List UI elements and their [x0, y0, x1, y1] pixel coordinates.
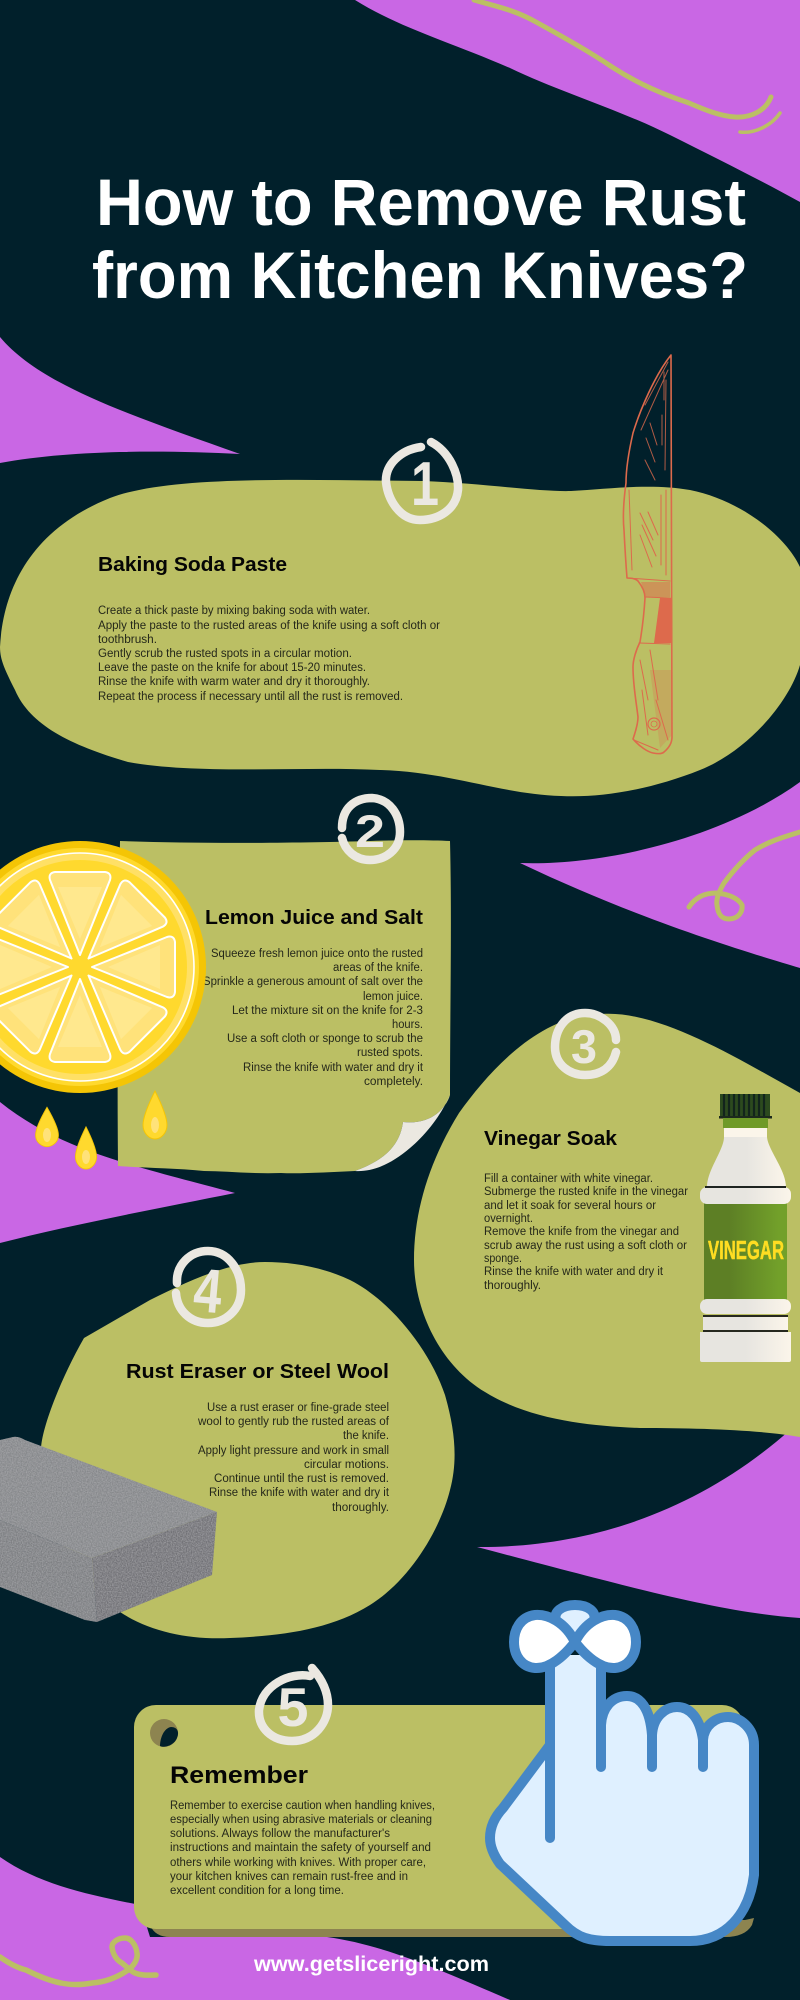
text: rust eraser steps: wool to gently rub the rusted areas of — [197, 1416, 390, 1428]
text: rust eraser steps: Apply light pressure and work in small — [198, 1445, 389, 1457]
badge: number 1: 1 — [411, 450, 439, 519]
panel: remember — [134, 1705, 754, 1937]
ribbon — [555, 1605, 595, 1642]
text: vinegar steps: overnight. — [484, 1213, 533, 1225]
text: lemon steps: Rinse the knife with water and dry it — [243, 1062, 424, 1074]
text: remember paragraph: instructions and maintain the safety of yourself and — [170, 1842, 431, 1854]
text: rust eraser steps: Use a rust eraser or fine-grade steel — [207, 1402, 389, 1414]
text: rust eraser steps: thoroughly. — [332, 1502, 389, 1514]
footer url: www.getsliceright.com — [253, 1953, 489, 1976]
text: remember paragraph: Remember to exercise caution when handling knives, — [170, 1800, 435, 1812]
text: rust eraser steps: Continue until the rust is removed. — [214, 1473, 389, 1485]
purple shape: lower right — [477, 1420, 800, 1618]
icon: rust eraser block — [0, 1437, 217, 1622]
text: lemon steps — [203, 948, 424, 1088]
badge: number 3 — [555, 1013, 616, 1075]
purple shape: mid right — [520, 782, 800, 968]
text: rust eraser steps — [197, 1402, 390, 1514]
purple shape: upper left — [0, 337, 240, 463]
text: remember paragraph: your kitchen knives can remain rust-free and in — [170, 1871, 408, 1883]
badge: number 2 — [342, 798, 400, 860]
text: lemon steps: Use a soft cloth or sponge to scrub the — [227, 1033, 423, 1045]
heading: remember: Remember — [170, 1762, 309, 1789]
purple shape: bottom left — [0, 1857, 510, 2000]
text: baking soda steps: Create a thick paste by mixing baking soda with water. — [98, 605, 370, 617]
heading: rust eraser or steel wool: Rust Eraser or Steel Wool — [126, 1360, 389, 1383]
heading: vinegar soak: Vinegar Soak — [484, 1127, 618, 1150]
squiggle: top right — [474, 0, 780, 132]
text: lemon steps: rusted spots. — [357, 1047, 423, 1059]
purple shape: top right — [355, 0, 800, 202]
badge: number 1 — [386, 442, 458, 520]
squiggle: bottom left — [0, 1938, 156, 1984]
badge: number 5: 5 — [278, 1676, 308, 1738]
text: vinegar steps: thoroughly. — [484, 1280, 541, 1292]
heading: lemon juice and salt: Lemon Juice and Salt — [205, 906, 423, 929]
icon: lemon slice — [0, 841, 206, 1093]
text: lemon steps: completely. — [364, 1076, 423, 1088]
purple shape: mid left — [0, 1102, 235, 1243]
title: How to Remove Rust — [96, 165, 746, 239]
icon: lemon drop 3 — [143, 1091, 167, 1139]
card hole — [150, 1719, 178, 1747]
heading: baking soda paste: Baking Soda Paste — [98, 553, 287, 576]
text: rust eraser steps: Rinse the knife with water and dry it — [209, 1487, 390, 1499]
panel: lemon juice and salt — [118, 840, 451, 1173]
text: vinegar steps: Fill a container with white vinegar. — [484, 1173, 653, 1185]
text: remember paragraph — [170, 1800, 435, 1897]
text: lemon steps: Let the mixture sit on the knife for 2-3 — [232, 1005, 423, 1017]
text: lemon steps: lemon juice. — [363, 991, 423, 1003]
badge: number 2: 2 — [355, 806, 385, 857]
text: lemon steps: Sprinkle a generous amount of salt over the — [203, 976, 423, 988]
text: baking soda steps: Apply the paste to the rusted areas of the knife using a soft cloth or — [98, 620, 440, 632]
text: lemon steps: Squeeze fresh lemon juice onto the rusted — [211, 948, 423, 960]
icon: hand with ribbon on finger — [490, 1605, 754, 1941]
text: baking soda steps: toothbrush. — [98, 634, 157, 646]
text: baking soda steps: Repeat the process if necessary until all the rust is removed. — [98, 691, 403, 703]
text: vinegar steps: Submerge the rusted knife in the vinegar — [484, 1186, 688, 1198]
text: vinegar steps — [484, 1173, 688, 1292]
text: baking soda steps — [98, 605, 440, 703]
badge: number 3: 3 — [571, 1020, 597, 1073]
icon: lemon drop 1 — [36, 1107, 58, 1147]
text: rust eraser steps: the knife. — [343, 1430, 389, 1442]
icon: lemon drop 2 — [75, 1127, 97, 1169]
badge: number 4 — [176, 1251, 241, 1327]
text: baking soda steps: Leave the paste on the knife for about 15-20 minutes. — [98, 662, 366, 674]
text: remember paragraph: excellent condition for a long time. — [170, 1885, 344, 1897]
icon: vinegar bottle — [700, 1094, 791, 1362]
text: rust eraser steps: circular motions. — [304, 1459, 389, 1471]
page curl — [355, 1095, 450, 1171]
text: baking soda steps: Gently scrub the rusted spots in a circular motion. — [98, 648, 352, 660]
text: vinegar steps: scrub away the rust using a soft cloth or — [484, 1240, 687, 1252]
panel: rust eraser or steel wool — [41, 1262, 455, 1638]
text: remember paragraph: solutions. Always follow the manufacturer's — [170, 1828, 390, 1840]
text: vinegar steps: sponge. — [484, 1253, 522, 1265]
panel: vinegar soak — [414, 1014, 800, 1437]
panel: baking soda paste — [0, 480, 800, 796]
text: vinegar steps: Remove the knife from the vinegar and — [484, 1226, 679, 1238]
text: baking soda steps: Rinse the knife with warm water and dry it thoroughly. — [98, 676, 370, 688]
text: vinegar steps: and let it soak for several hours or — [484, 1200, 656, 1212]
card shadow — [150, 1918, 754, 1937]
text: lemon steps: areas of the knife. — [333, 962, 423, 974]
badge: number 5 — [259, 1668, 328, 1741]
title — [92, 165, 748, 312]
text: lemon steps: hours. — [392, 1019, 423, 1031]
title: from Kitchen Knives? — [92, 238, 748, 312]
badge: number 4: 4 — [191, 1256, 225, 1327]
text: remember paragraph: especially when using abrasive materials or cleaning — [170, 1814, 432, 1826]
icon: knife — [623, 355, 672, 754]
text: vinegar steps: Rinse the knife with water and dry it — [484, 1266, 664, 1278]
text: remember paragraph: others while working with knives. With proper care, — [170, 1857, 426, 1869]
squiggle: mid right — [689, 832, 800, 919]
